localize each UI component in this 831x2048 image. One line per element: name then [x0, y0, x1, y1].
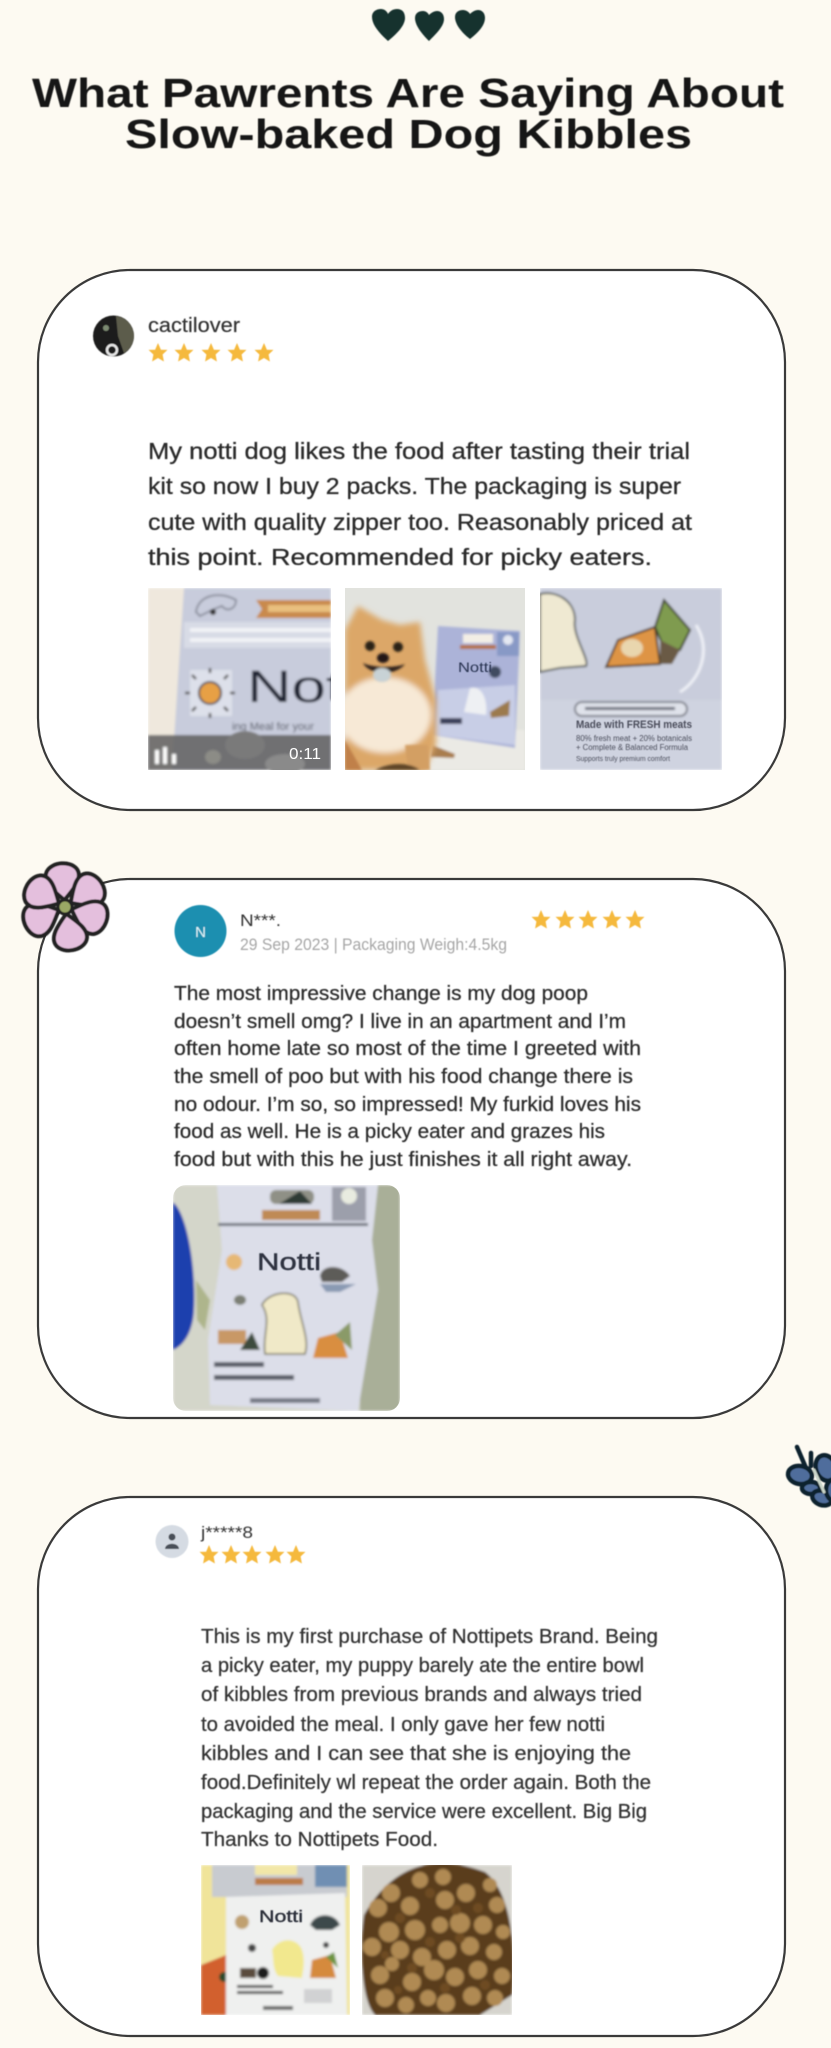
review text: kit so now I buy 2 packs. The packaging is super — [148, 473, 681, 499]
photo: Notti bag beside blue object: Notti — [257, 1249, 321, 1276]
avatar: N — [174, 905, 226, 957]
review text — [174, 983, 641, 1171]
reviewer name: cactilover — [148, 315, 240, 337]
review text: kibbles and I can see that she is enjoying the — [201, 1742, 631, 1765]
panel: review card j*****8 — [38, 1497, 785, 2036]
photo: bag close-up made with fresh meats: 80% fresh meat + 20% botanicals — [576, 734, 692, 743]
star rating — [532, 910, 644, 928]
star rating — [148, 343, 274, 362]
review text: no odour. I’m so, so impressed! My furkid loves his — [174, 1094, 641, 1116]
review text: Thanks to Nottipets Food. — [201, 1828, 438, 1851]
photo: pomeranian dog with bag: Notti — [458, 659, 492, 675]
review text: cute with quality zipper too. Reasonably priced at — [148, 509, 693, 535]
title: Slow-baked Dog Kibbles — [125, 111, 692, 157]
photo: video still of Notti bag: Not — [247, 661, 344, 712]
review text: of kibbles from previous brands and always tried — [201, 1683, 642, 1706]
review text: this point. Recommended for picky eaters. — [148, 544, 652, 570]
reviewer name: j*****8 — [200, 1523, 253, 1542]
review text: to avoided the meal. I only gave her few notti — [201, 1713, 605, 1736]
title: What Pawrents Are Saying About — [32, 70, 784, 116]
icon: three hearts — [372, 9, 485, 41]
review text: The most impressive change is my dog poop — [174, 983, 588, 1005]
review text: food.Definitely wl repeat the order again. Both the — [201, 1771, 651, 1794]
icon: blue butterfly — [787, 1447, 831, 1508]
photo: bowl of kibbles — [362, 1863, 513, 2015]
review text: the smell of poo but with his food change there is — [174, 1066, 633, 1088]
panel: review card N*** — [38, 879, 785, 1418]
avatar: N: N — [195, 924, 206, 941]
card outline — [38, 1497, 785, 2036]
photo: bag close-up made with fresh meats: Made with FRESH meats — [576, 719, 692, 731]
review date and weight: 29 Sep 2023 | Packaging Weigh:4.5kg — [240, 935, 507, 954]
photo: bag close-up made with fresh meats — [540, 588, 722, 770]
review text — [148, 438, 693, 570]
title — [32, 70, 784, 157]
review text: This is my first purchase of Nottipets Brand. Being — [201, 1625, 658, 1648]
photo: video still of Notti bag — [148, 588, 344, 774]
photo: Notti bag on yellow background: Notti — [259, 1907, 303, 1926]
photo: bag close-up made with fresh meats: + Complete & Balanced Formula — [576, 743, 689, 752]
review text: packaging and the service were excellent. Big Big — [201, 1800, 647, 1823]
review text: a picky eater, my puppy barely ate the entire bowl — [201, 1654, 644, 1677]
reviewer name: N***. — [240, 911, 281, 930]
star rating — [200, 1545, 306, 1564]
photo: pomeranian dog with bag — [339, 588, 525, 770]
review text: food but with this he just finishes it all right away. — [174, 1149, 632, 1171]
video duration: 0:11 — [289, 746, 321, 763]
review text: food as well. He is a picky eater and grazes his — [174, 1121, 605, 1143]
photo: Notti bag beside blue object — [173, 1185, 400, 1411]
icon: pink flower — [18, 862, 112, 953]
review text: often home late so most of the time I greeted with — [174, 1038, 641, 1060]
card outline — [38, 270, 785, 810]
photo: Notti bag on yellow background — [201, 1865, 350, 2015]
review text — [201, 1625, 658, 1851]
avatar: generic user — [156, 1525, 188, 1558]
card outline — [38, 879, 785, 1418]
panel: review card cactilover — [38, 270, 785, 810]
review text: My notti dog likes the food after tasting their trial — [148, 438, 690, 464]
photo: video still of Notti bag: ing Meal for your — [232, 721, 314, 733]
review text: doesn’t smell omg? I live in an apartment and I’m — [174, 1011, 626, 1033]
avatar: cactilover — [93, 316, 134, 356]
photo: bag close-up made with fresh meats: Supports truly premium comfort — [576, 756, 670, 763]
